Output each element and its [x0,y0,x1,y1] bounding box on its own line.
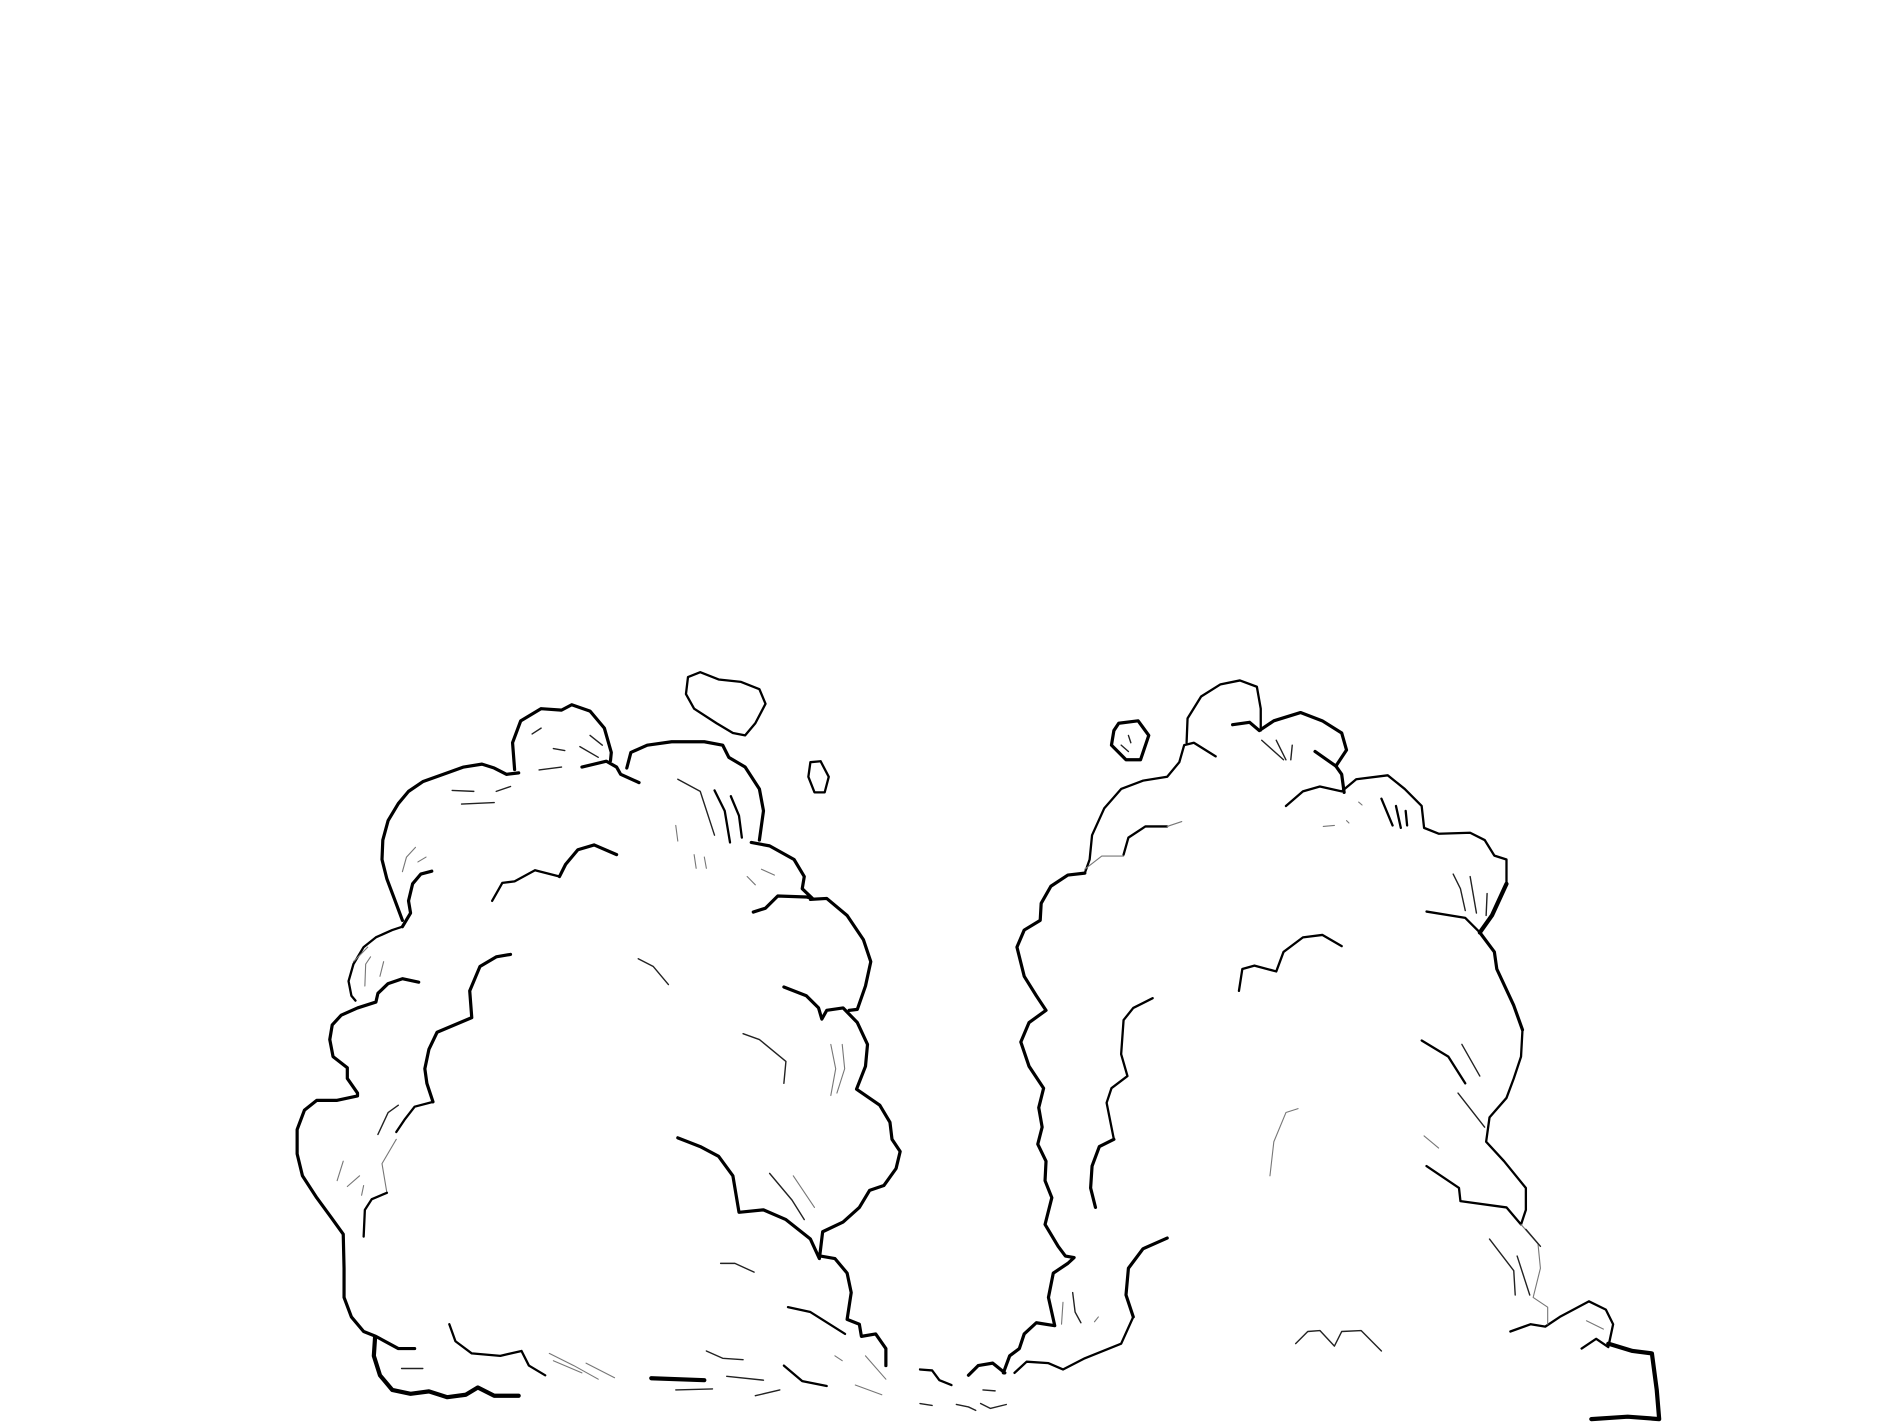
small round puff [1111,721,1149,760]
left cloud inner folds [364,845,845,1396]
left smoke cloud [297,672,900,1397]
left cloud outline [297,705,900,1397]
small puff: top right of left cloud [686,672,766,735]
low puff joining the two clouds [920,1363,1005,1410]
left cloud shading strokes [337,728,886,1395]
right cloud outline [1003,680,1659,1419]
right smoke cloud [920,680,1659,1419]
small puff: tiny droplet [808,761,829,792]
right cloud inner folds [1015,822,1485,1373]
right cloud shading strokes [981,740,1603,1408]
